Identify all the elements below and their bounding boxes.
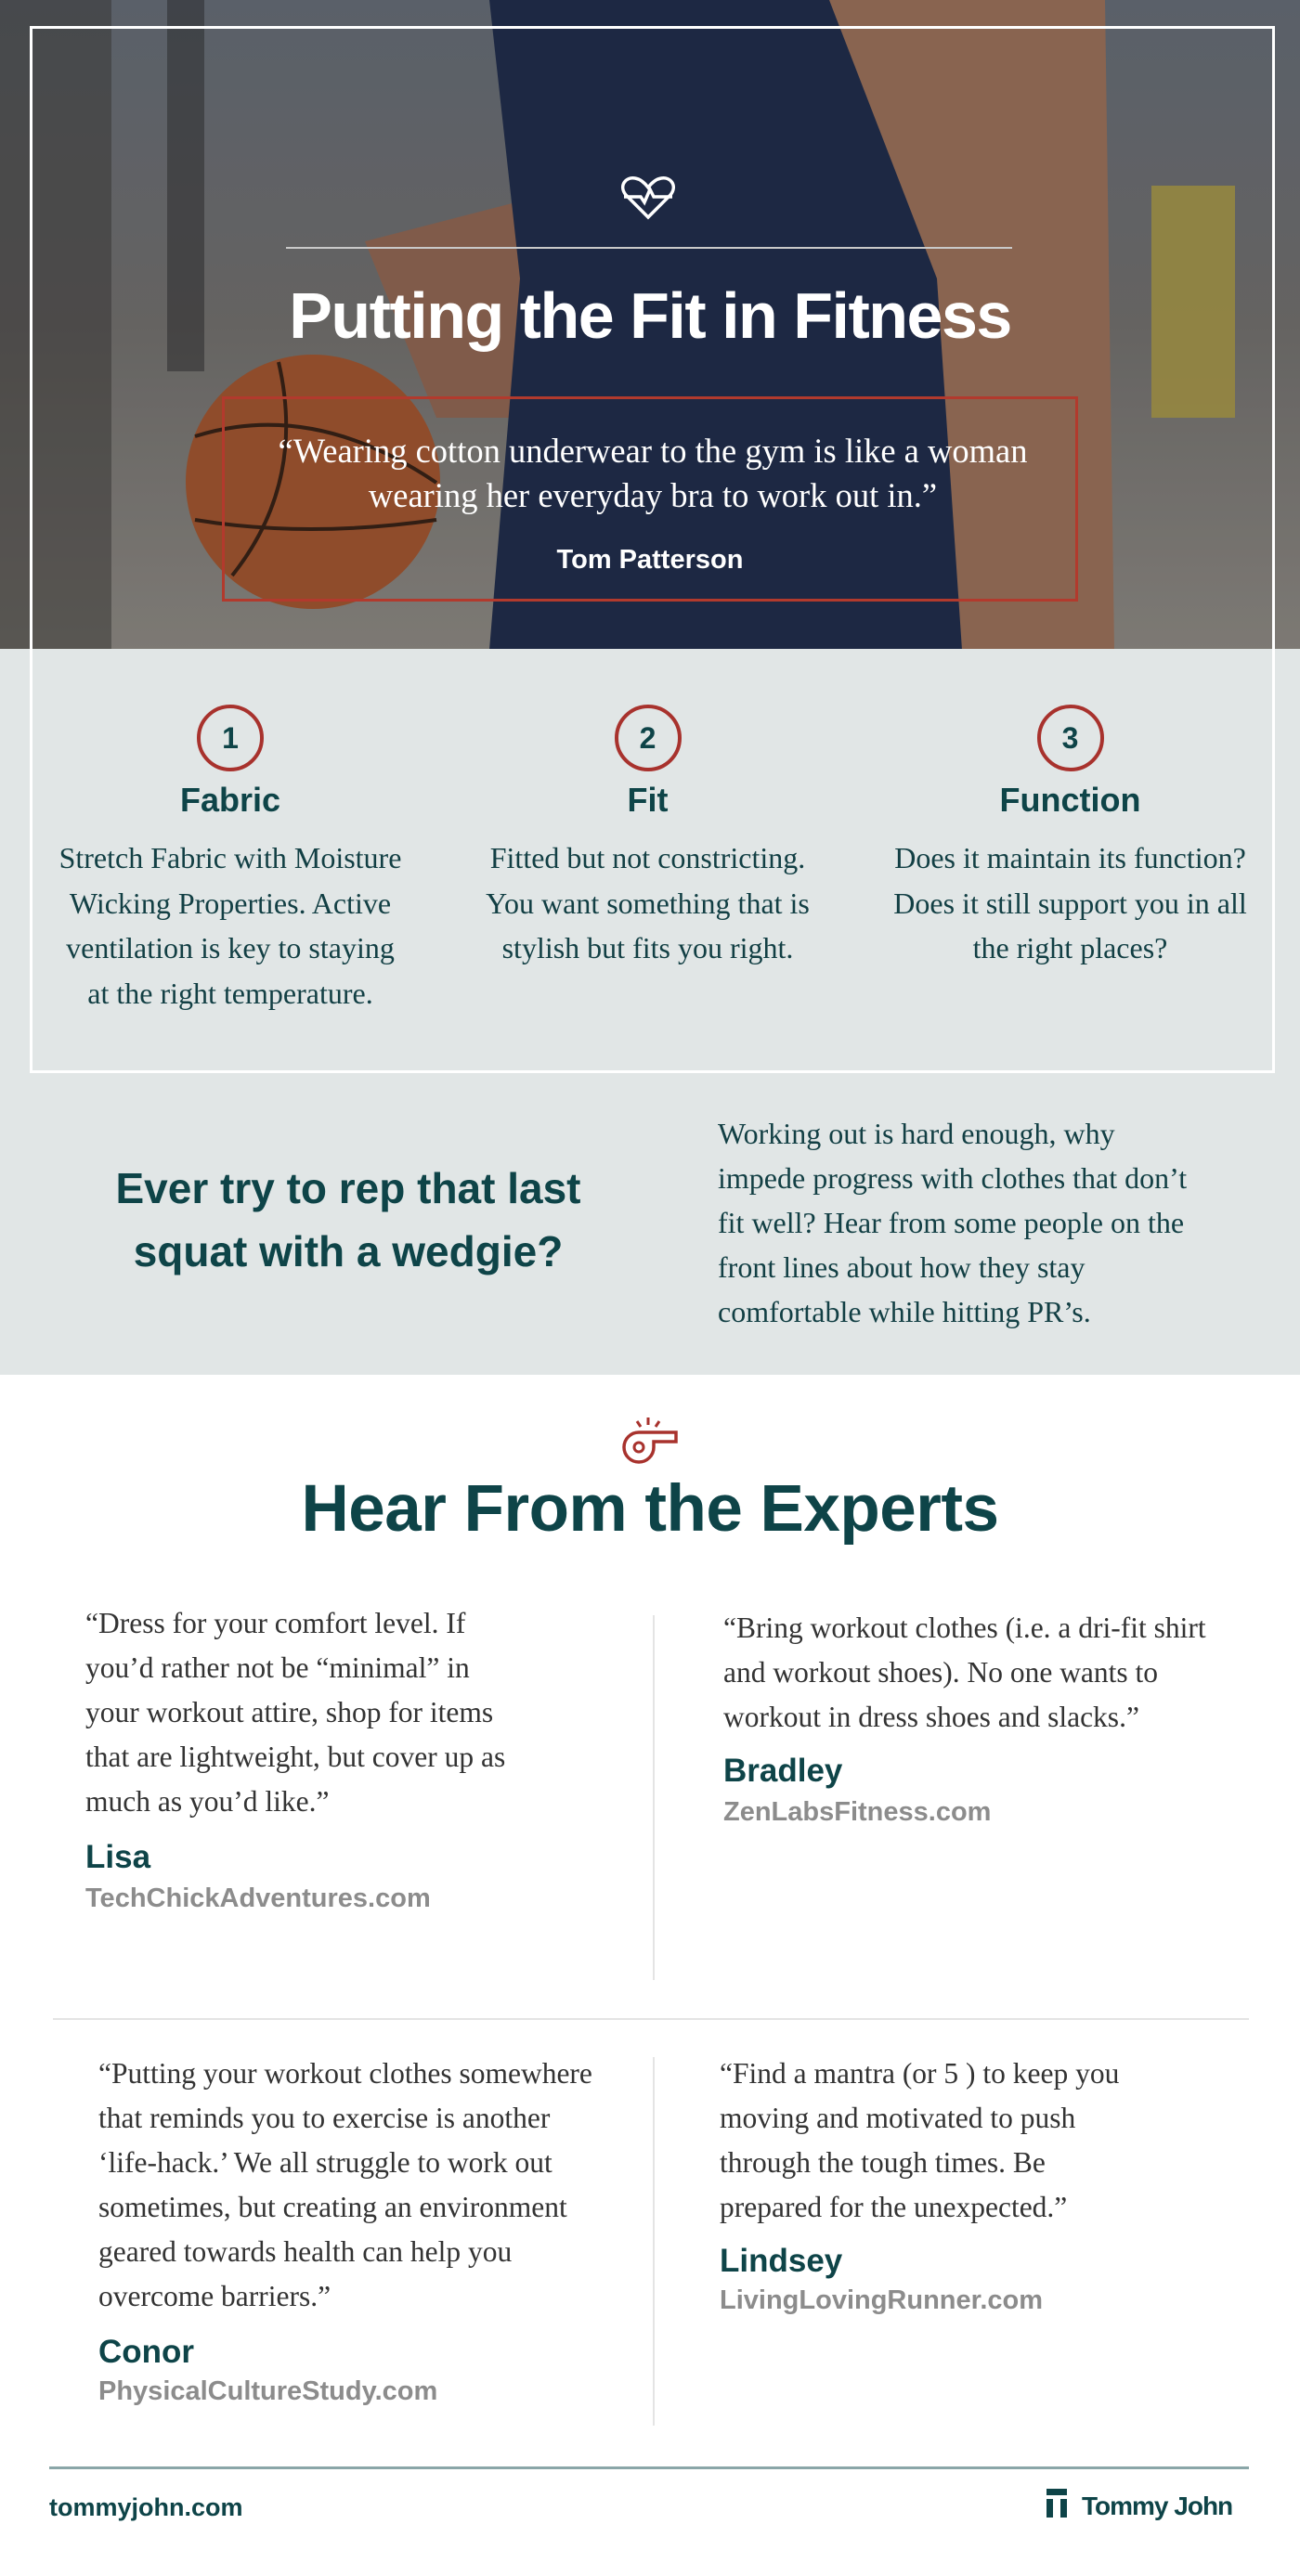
icon: heart pulse <box>621 176 675 219</box>
quote: Conor: Conor <box>98 2334 194 2370</box>
footer url: tommyjohn.com <box>49 2493 243 2521</box>
quote: Lisa <box>85 1607 505 1913</box>
quote: Bradley: Bradley <box>723 1753 842 1789</box>
panel: fit: Fitted but not constricting. You want something that is stylish but fits you right. <box>486 841 810 964</box>
callout: quote box: Tom Patterson <box>557 545 743 575</box>
heading: experts: Hear From the Experts <box>301 1472 999 1546</box>
quote: Lindsey: “Find a mantra (or 5 ) to keep you moving and motivated to push through the tough times. Be prepared for the unexpected.” <box>720 2057 1119 2223</box>
logo: Tommy John: Tommy John <box>1082 2492 1232 2520</box>
quote: Lindsey: LivingLovingRunner.com <box>720 2285 1043 2315</box>
heading: wedgie: Ever try to rep that last <box>115 1164 581 1212</box>
white frame <box>30 26 1275 1073</box>
panel: function <box>893 705 1247 964</box>
quote: Lindsey <box>720 2057 1119 2315</box>
panel: fabric: Fabric <box>180 781 280 819</box>
title: Putting the Fit in Fitness <box>289 279 1011 352</box>
panel: fit <box>486 705 810 964</box>
heading: wedgie: squat with a wedgie? <box>134 1227 563 1275</box>
quote: Lisa: “Dress for your comfort level. If you’d rather not be “minimal” in your workout attire, shop for items that are lightweight, but cover up as much as you’d like.” <box>85 1607 505 1818</box>
panel: fit: 2 <box>640 721 656 755</box>
panel: function: 3 <box>1062 721 1078 755</box>
quote: Bradley: ZenLabsFitness.com <box>723 1797 991 1827</box>
text block: intro: Working out is hard enough, why impede progress with clothes that don’t fit well? Hear from some people on the front lines about how they stay comfortable while hitting PR’s. <box>718 1117 1187 1328</box>
quote: Lisa: TechChickAdventures.com <box>85 1883 431 1913</box>
quote: Conor: “Putting your workout clothes somewhere that reminds you to exercise is another ‘life-hack.’ We all struggle to work out sometimes, but creating an environment geared towards health can help you overcome barriers.” <box>98 2057 592 2312</box>
panel: fabric <box>59 705 401 1010</box>
heading: wedgie <box>115 1164 581 1275</box>
quote: Lindsey: Lindsey <box>720 2243 842 2279</box>
quote: Lisa: Lisa <box>85 1839 150 1875</box>
panel: fabric: 1 <box>222 721 239 755</box>
gray band <box>0 649 1300 1375</box>
quote: Bradley: “Bring workout clothes (i.e. a dri-fit shirt and workout shoes). No one wants to workout in dress shoes and slacks.” <box>723 1612 1206 1733</box>
callout: quote box <box>222 396 1078 602</box>
icon: whistle <box>622 1417 678 1464</box>
hero photo background <box>0 0 1300 649</box>
quote: Bradley <box>723 1612 1206 1827</box>
panel: function: Function <box>1000 781 1140 819</box>
quote: Conor: PhysicalCultureStudy.com <box>98 2376 437 2406</box>
panel: function: Does it maintain its function? Does it still support you in all the right places? <box>893 841 1247 964</box>
callout: quote box: wearing her everyday bra to work out in.” <box>369 476 937 514</box>
panel: fabric: Stretch Fabric with Moisture Wicking Properties. Active ventilation is key to staying at the right temperature. <box>59 841 401 1010</box>
panel: fit: Fit <box>628 781 668 819</box>
callout: quote box: “Wearing cotton underwear to the gym is like a woman <box>279 432 1027 470</box>
